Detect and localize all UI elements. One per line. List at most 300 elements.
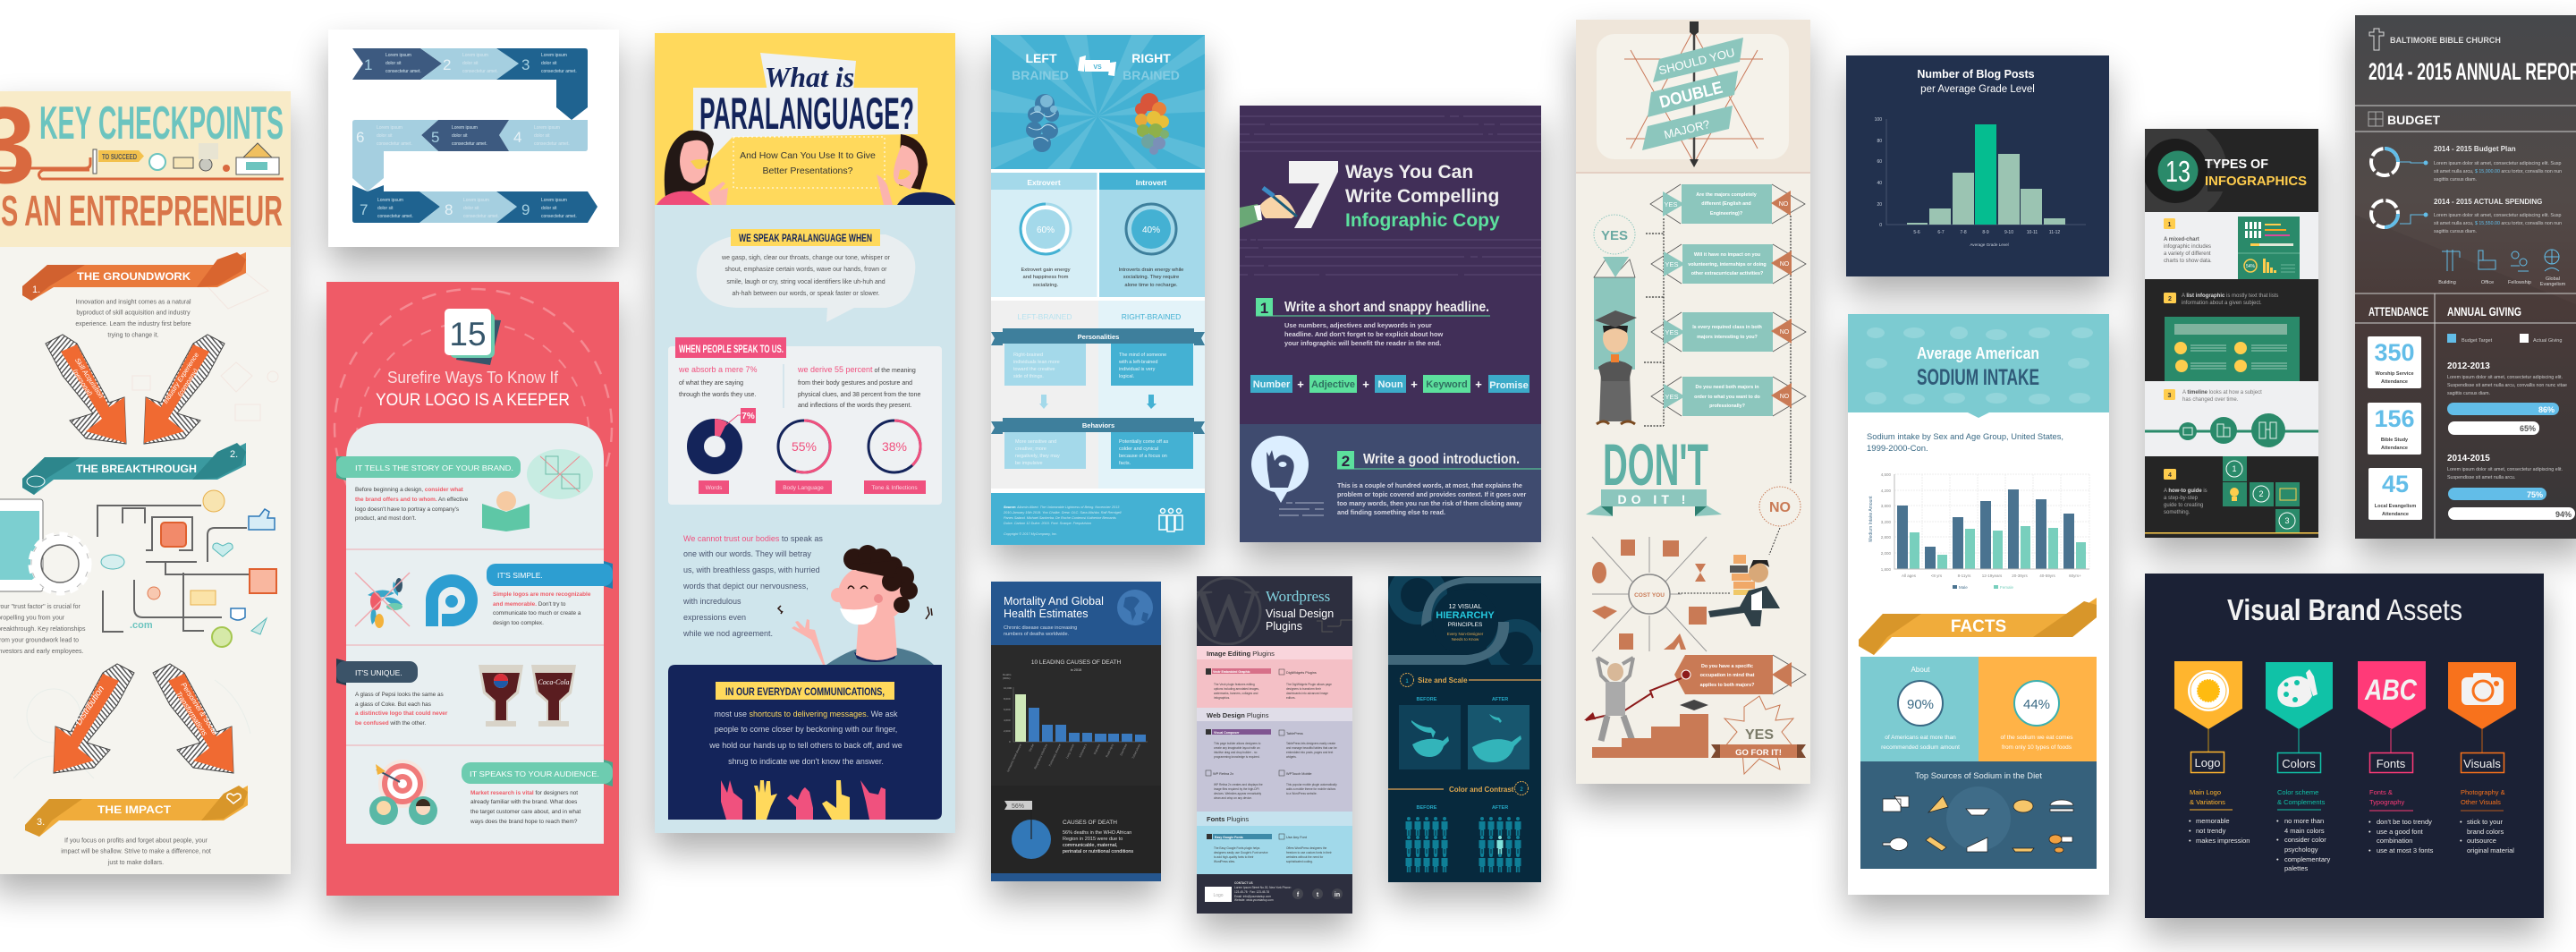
lorem captions: dolor sit [452,133,468,139]
icons: budget categories [2442,250,2559,271]
comparison section backgrounds [991,301,1205,489]
x axis labels: Average Grade Level [1970,242,2009,247]
ribbon: personalities: Personalities [1078,333,1119,341]
column: visuals: • [2460,837,2462,845]
section: image editing plugins: designers to transform their [1286,687,1322,691]
text: trust paragraph: We cannot trust our bodies to speak as [683,534,823,543]
ribbon: behaviors: Behaviors [1082,421,1114,429]
box: before whale [1399,705,1461,769]
section 3: timeline: A timeline looks at how a subject [2182,390,2262,395]
text: 7 percent: through the words they use. [679,392,756,398]
text: simple paragraph: and memorable. Don't try to [493,601,565,608]
arrow: distribution: Distribution [74,684,106,727]
section 4: how-to: a step-by-step [2164,496,2199,501]
footer: 2010-January 15th 2019. Yoo Chalke. Drew. OLC. Sara Alishka. Ralf Rernigell [1003,511,1122,514]
lorem captions: consectetur amet. [386,69,421,74]
panel: 2014-2015 annual report [2355,15,2576,539]
column: logo: • [2189,817,2191,825]
bar chart: leading causes: 4,000 [1004,718,1011,722]
rotated category labels [1006,743,1141,773]
text: bubble paragraph: ah-hah between our words, or speak faster or slower. [733,291,880,297]
box: left behavior: be impulsive [1015,461,1043,466]
tag: 56% [1004,801,1032,810]
cost you wheel: COST YOU [1634,592,1665,599]
grid [1894,474,2089,569]
ribbon: vs: VS [1093,64,1102,71]
text: story paragraph: logo doesn't have to portray a company's [355,506,459,513]
icon: right brain [1135,93,1169,155]
text: 55 percent: from their body gestures and posture and [798,380,912,387]
stat: 90 percent: of Americans eat more than [1885,735,1956,741]
text: unique paragraph: a glass of Coke. But each has [355,701,431,708]
what is heading: What is [765,61,854,93]
text: story paragraph: the brand offers and to whom. An effective [355,497,468,503]
axis labels: 60yrs+ [2069,574,2081,578]
box: right personality: The mind of someone [1119,353,1166,358]
y axis labels: 0 [1879,223,1882,228]
text: audience paragraph: the target customer care about, and in what [470,809,580,815]
tag: it's unique [336,659,418,685]
tag: speaks to your audience: IT SPEAKS TO YOUR AUDIENCE. [470,769,599,778]
title: TYPES OF [2205,157,2268,172]
text: 2014-2015: Suspendisse sit amet nulla arcu. [2447,475,2515,480]
title: Every Non-Designer [1447,632,1484,636]
column: fonts: • [2368,818,2371,826]
footer: Source: Altamin Albert. The Unbearable Lightness of Being. November 2013 [1004,506,1119,509]
graduate figure [1594,257,1637,424]
column: colors: Color scheme [2277,788,2318,796]
step 1 text: your infographic will benefit the reader in the end. [1284,339,1441,347]
panel: wordpress visual design plugins [1194,576,1352,914]
subtitle [733,137,885,188]
arrow: skill acquisition: Skill Acquisition [73,356,106,400]
decorative rings header [1388,576,1541,665]
lorem captions: Lorem ipsum [462,53,488,58]
footer: Panes Saland. Michael Sackerba. De Roche Contemsi Katherine Bernards [1004,516,1116,520]
footer: contact and social: Website: www.yourstartup.com [1234,898,1274,902]
text: audience paragraph: ways does the brand hope to reach them? [470,819,578,825]
subtitle: Chronic disease cause increasing [1004,625,1077,631]
phone and gear [0,499,89,592]
stat card: 45: 45 [2382,471,2409,497]
stat: 44 percent: from only 10 types of foods [2002,744,2072,751]
section 4: how-to: A how-to guide is [2164,489,2207,494]
step 2 heading: Write a good introduction. [1363,452,1520,467]
text: trust paragraph: expressions even [683,613,746,622]
text: causes of death: CAUSES OF DEATH [1063,820,1117,826]
arrow: down left [1039,395,1048,409]
badge 13 [2157,150,2199,191]
heading: left brained: LEFT [1025,51,1057,65]
footer: contact and social: f [1297,892,1300,898]
text: 2012-2013: Lorem ipsum dolor sit amet, consectetur adipiscing elit. [2447,375,2563,380]
text: 55 percent: physical clues, and 38 percent from the tone [798,392,920,398]
heading: right brained: BRAINED [1123,68,1180,82]
section: fonts plugins [1197,812,1352,874]
question 2: other extracurricular activities? [1691,271,1763,276]
progress bars: 2014-2015 [2448,488,2575,520]
text: causes of death: 56% deaths in the WHO African [1063,830,1131,836]
donut: words 7%: Words [706,485,723,491]
box: right behavior [1111,432,1193,469]
banner: the groundwork: 1. [32,285,40,295]
arrow: to cost you [1678,592,1730,594]
paralanguage heading: PARALANGUAGE? [699,89,914,139]
stat card: 156: Attendance [2381,446,2408,451]
title: Health Estimates [1004,608,1088,620]
icon: simple P logo [426,574,478,626]
box: left personality: individuals lean more [1013,360,1060,365]
panel: blog posts histogram [1846,55,2109,276]
ring: body language 55% [775,421,832,494]
text: story paragraph: product, and most don't. [355,515,417,522]
section: web design plugins: devices. Websites appear remarkably [1214,792,1261,795]
question 1 [1650,184,1805,224]
arrow: distribution [54,664,134,773]
question 2: volunteering, internships or doing [1688,262,1767,268]
heading: attendance: ATTENDANCE [2368,304,2428,319]
title: key checkpoints: KEY CHECKPOINTS [39,98,284,149]
text: trust paragraph: words that depict our nervousness, [682,582,809,591]
question 1: different (English and [1701,201,1751,207]
section: fonts plugins: designers easily use Google's Font service [1214,851,1268,854]
sunburst header [991,35,1205,170]
banner: the breakthrough: THE BREAKTHROUGH [76,463,197,475]
title: Infographic Copy [1345,210,1500,231]
title banner: double: DOUBLE [1657,79,1724,113]
section 4: how-to: 3 [2284,516,2290,525]
star lines and vertical arrow [1624,21,1764,167]
legend [2447,334,2562,344]
text: unique paragraph: be confused with the other. [355,720,426,727]
section 3: timeline: 3 [2168,393,2172,399]
section 2: list: information about a given subject. [2182,301,2262,306]
section: fonts plugins: WordPress sites. [1214,860,1235,863]
legend [1953,585,2014,590]
column: logo: memorable [2196,817,2230,825]
icon: plug [1317,620,1352,632]
section: web design plugins: and manage beautiful tables that can be [1286,746,1337,750]
section 4: how-to: 1 [2232,464,2237,473]
banner: the breakthrough [22,443,246,495]
headline formula: Noun [1377,379,1403,390]
numerals and captions: 1 [364,56,372,73]
question 3 [1651,312,1806,352]
column: extrovert: Extrovert gain energy [1021,268,1071,273]
rotated category labels: Respiratory infections [1033,743,1048,769]
subtitle: Better Presentations? [763,166,853,176]
column: visuals: outsource [2467,837,2496,845]
text: bubble paragraph: smile, laugh or cry, string vocal identifiers like uh-huh and [726,279,886,285]
legend: Actual Giving [2533,338,2562,344]
lorem captions: dolor sit [377,206,394,211]
text: 2012-2013: Suspendisse sit amet nulla arcu, convallis non nunc vitae [2447,383,2567,388]
section: image editing plugins: The DigiWidgets Plugin allows page [1286,683,1332,686]
column: logo: makes impression [2196,837,2250,845]
lorem captions [377,53,577,219]
banner: the groundwork: THE GROUNDWORK [77,270,191,283]
panel: 7 ways to write infographic copy [1240,106,1541,542]
faint sketch background [13,273,278,778]
box: right personality: logical. [1119,374,1135,379]
ribbon: do it: DO IT ! [1618,492,1690,506]
box: right behavior: facts. [1119,461,1131,466]
progress bars: 2012-2013: 65% [2520,424,2536,433]
bar chart: leading causes [1003,673,1148,773]
headline formula: + [1297,378,1304,391]
stat: 90 percent: About [1911,666,1930,674]
section: fonts plugins: Easy Google Fonts [1215,836,1243,839]
character: nervous man [778,545,934,667]
arrow: personnel and social transformation: Personnel & Social [179,681,219,736]
arrow: down right [1147,395,1157,409]
legend: Male [1959,585,1968,590]
column: visuals [2448,662,2516,854]
text: simple paragraph: design too complex. [493,620,544,626]
question 4 [1651,377,1806,416]
chart title: in 2015 [1071,668,1081,672]
footer bar [991,873,1161,881]
footer: contact and social: Email: info@yourstartup.com [1234,895,1271,898]
stat card: 45 [2368,468,2422,520]
box: right personality: individual is very [1119,367,1156,372]
column: colors [2266,662,2333,872]
question 1: Are the majors completely [1696,192,1757,198]
question 3: NO [1780,329,1790,336]
question 4: NO [1780,394,1790,400]
headline formula: Number [1253,379,1291,390]
section: image editing plugins: Image Editing Plugins [1207,650,1275,658]
column: fonts: • [2368,846,2371,854]
section: image editing plugins: watermarks, banners, collages and [1214,692,1258,695]
banner: the impact: 3. [37,817,45,828]
yellow footer line [2145,532,2318,533]
box: right behavior: colder and cynical [1119,446,1158,452]
question 5 [1674,655,1806,694]
title: HIERARCHY [1436,610,1495,621]
section 4: how-to: something. [2164,510,2190,515]
icon: target and audience [369,760,437,825]
heading: size and scale: Size and Scale [1418,676,1468,684]
arrow: personnel and social transformation [153,664,233,773]
icon: pepsi glass [479,665,523,727]
lorem captions: consectetur amet. [452,141,487,147]
x axis labels: 11-12 [2049,230,2060,235]
y axis labels: 40 [1877,181,1882,186]
section 4: how-to: guide to creating [2164,503,2203,508]
icon: hand with pen [1240,188,1297,228]
column: introvert: alone time to recharge. [1124,283,1178,288]
panel: 15 logo keeper infographic [326,282,619,896]
section: web design plugins: programming knowledge is required. [1214,755,1260,759]
heading: left-brained and right-brained: RIGHT-BRAINED [1122,312,1181,321]
step 1 heading: Write a short and snappy headline. [1284,300,1489,315]
numeral 7 [1289,161,1338,228]
header background [1576,20,1810,174]
stat: 90 percent: recommended sodium amount [1881,744,1960,751]
column: colors: complementary [2284,855,2331,863]
text: groundwork paragraph: Innovation and insight comes as a natural [75,299,191,306]
column: introvert: Introverts drain energy while [1119,268,1183,273]
column: visuals: Visuals [2463,757,2501,770]
section: web design plugins: image files required by the high-DPI [1214,787,1259,791]
donut: budget plan [2371,149,2428,175]
cost you wheel [1592,537,1707,651]
arrow: industry experience: (company) [175,367,199,398]
progress bars: 2012-2013 [2447,403,2559,435]
callout: no [1759,487,1801,526]
box: left personality: side of things. [1013,374,1044,379]
lorem captions: Lorem ipsum [377,125,402,131]
column: logo: Main Logo [2190,788,2221,796]
text: audience paragraph: Market research is vital for designers not [470,790,578,796]
lorem captions: Lorem ipsum [377,198,403,203]
axis labels: 12-19years [1982,574,2003,578]
section: web design plugins: to a WordPress website. [1286,792,1318,795]
subtitle: numbers of deaths worldwide. [1004,632,1070,637]
footer: contact and social: Logo [1213,893,1224,898]
step 1 text: headline. And don't forget to be explicit about how [1284,330,1443,338]
text: 2012-2013 [2447,361,2567,396]
icon: crossed-out complex logo [355,573,410,628]
column: colors: • [2276,836,2279,844]
people grid: after [1479,817,1521,872]
section 4: how-to: 4 [2168,472,2172,479]
callout: yes go for it: YES [1745,727,1774,743]
text: 55 percent: and inflections of the words they present. [798,403,911,409]
section: web design plugins: widgets. [1286,755,1297,759]
lorem captions: consectetur amet. [463,214,499,219]
ring: body language 55%: Body Language [783,485,824,491]
question 2: YES [1665,260,1679,268]
axis labels [1868,472,2081,578]
text: 2012-2013: sagittis cursus diam. [2447,391,2490,396]
panel: 13 types of infographics [2145,129,2318,538]
axis labels: <8 yrs [1931,574,1943,578]
panel: numbered arrow flow diagram [328,30,619,247]
step 2 text: This is a couple of hundred words, at most, that explains the [1337,481,1522,489]
arrow: no to student [1769,528,1780,555]
labels: budget categories: Building [2438,280,2456,285]
headline formula: + [1411,378,1418,391]
text: budget plan: sit amet nulla arcu, $ 15,000.00 arcu tortor, convallis non nun [2434,169,2562,174]
numerals and captions: 5 [431,129,439,146]
character: running student with books [1708,555,1780,626]
headline formula [1250,375,1530,393]
x axis labels: 9-10 [2004,230,2013,235]
section: image editing plugins: Vectr Embedded Graphic [1213,670,1250,674]
stat: 90 percent [1860,657,1979,761]
tag: everyday communications [716,682,894,700]
stat card: 45: Local Evangelism [2375,504,2416,509]
title: as an entrepreneur: S AN ENTREPRENEUR [1,188,283,235]
question 4: order to what you want to do [1694,395,1761,400]
stat card: 156: Bible Study [2381,438,2409,443]
banner: facts: FACTS [1951,617,2006,636]
column: fonts: don't be too trendy [2377,818,2432,826]
network lines [97,506,250,632]
x axis labels: 6-7 [1937,230,1945,235]
text: 7 percent: we absorb a mere 7% [678,365,758,374]
section 1: mixed chart: A mixed-chart [2164,237,2199,242]
donut: words 7%: 7% [741,412,755,421]
text: actual spending: 2014 - 2015 ACTUAL SPENDING [2434,198,2542,206]
text: budget plan: Lorem ipsum dolor sit amet, consectetur adipiscing elit. Susp [2434,161,2562,166]
chart subtitle: Sodium intake by Sex and Age Group, United States, [1867,432,2063,442]
heading: size and scale [1401,673,1541,687]
text: budget plan: sagittis cursus diam. [2434,177,2477,183]
callout: yes: YES [1601,228,1628,243]
headline formula: Promise [1489,380,1529,391]
text: trust paragraph: while we nod agreement. [682,629,773,638]
question 4: Do you need both majors in [1696,385,1758,390]
section: fonts plugins: Offers WordPress designers the [1286,846,1326,850]
section: fonts plugins: Fonts Plugins [1207,815,1249,823]
text: everyday paragraph: we hold our hands up to tell others to back off, and we [708,741,902,750]
chart subtitle: 1999-2000-Con. [1867,444,1928,454]
footer: contact and social: 123-45-78 · Fax: 123-45-78 [1234,890,1269,894]
ribbon: behaviors [991,418,1205,434]
axis labels: All ages [1902,574,1917,578]
text: 7 percent: of what they are saying [679,380,743,387]
ring: tone and inflections 38% [864,421,926,494]
column: fonts: Fonts [2377,757,2406,770]
decorative diagonal [2355,215,2576,539]
box: left behavior: negatively, they may [1015,454,1060,459]
footer: contact and social: in [1335,892,1340,898]
arrow: skill acquisition: (personal) [71,368,94,397]
lorem captions: Lorem ipsum [386,53,411,58]
title banner: should you: SHOULD YOU [1657,46,1736,77]
callout: yes [1594,215,1635,254]
ring: tone and inflections 38%: Tone & Inflections [871,485,918,491]
text: unique paragraph: a distinctive logo that could never [355,710,448,717]
section 4: how-to: 2 [2258,489,2264,498]
question 5: applies to both majors? [1700,683,1754,688]
section: web design plugins: This page builder allows designers to [1214,742,1261,745]
tag: it's simple [487,561,613,589]
section: image editing plugins [1197,646,1352,708]
dashed decorative arcs [335,289,612,566]
text: actual spending: Lorem ipsum dolor sit amet, consectetur adipiscing elit. Susp [2434,213,2562,218]
section: fonts plugins: sophisticated coding. [1286,860,1313,863]
text: 2012-2013: 2012-2013 [2447,361,2490,371]
lorem captions: Lorem ipsum [463,198,489,203]
stat card: 350: 350 [2374,339,2415,366]
section: web design plugins: Visual Composer [1214,731,1240,735]
section: web design plugins: WP Retina 2x [1213,772,1233,776]
axis labels: 3,800 [1881,504,1891,508]
icon: left brain [1026,94,1059,152]
panel: average american sodium intake [1848,314,2109,895]
column: introvert [1099,173,1205,297]
y axis labels: 20 [1877,202,1882,208]
icon: coke glass: Coca-Cola [538,678,570,686]
axis labels: 2,000 [1881,551,1891,556]
tag: it's unique: IT'S UNIQUE. [355,668,402,677]
labels: budget categories: Office [2481,280,2494,285]
column: visuals: • [2460,818,2462,826]
text: 55 percent: we derive 55 percent of the meaning [798,365,916,374]
text: impact paragraph: If you focus on profits and forget about people, your [64,837,208,845]
headline formula: + [1475,378,1482,391]
y axis labels [1875,117,1882,228]
question 4: YES [1665,393,1679,401]
column: logo: • [2189,827,2191,835]
section: image editing plugins: The Vectr plugin features editing [1214,683,1255,686]
bar chart: leading causes: 6,000 [1004,708,1011,711]
icon: cross [2369,29,2384,50]
